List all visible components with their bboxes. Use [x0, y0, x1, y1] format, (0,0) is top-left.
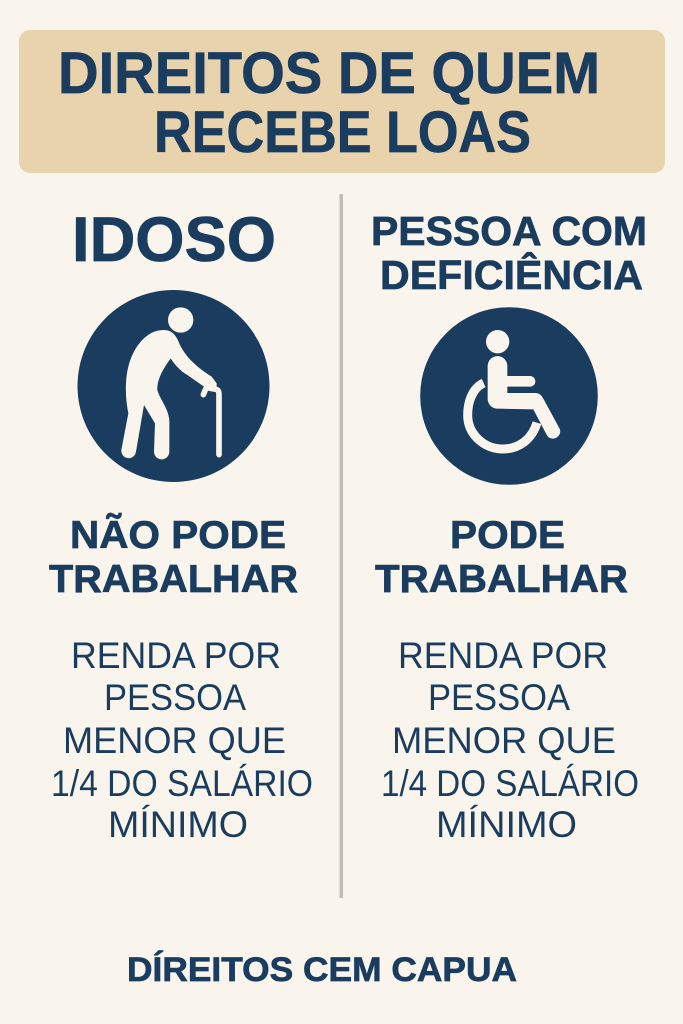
- title banner: [19, 30, 665, 173]
- panel: idoso: [49, 205, 313, 845]
- heading: idoso: IDOSO: [72, 205, 276, 275]
- footer text: DÍREITOS CEM CAPUA: [127, 951, 517, 989]
- icon: elderly person with cane: [78, 290, 270, 482]
- income text right: RENDA POR: [398, 635, 608, 676]
- status: nao pode trabalhar: [49, 513, 298, 601]
- status: pode trabalhar: TRABALHAR: [375, 558, 628, 601]
- income text right: PESSOA: [428, 677, 570, 718]
- title text: DIREITOS DE QUEM: [58, 41, 600, 106]
- income text left: MENOR QUE: [63, 720, 286, 761]
- title text: RECEBE LOAS: [154, 100, 531, 165]
- status: pode trabalhar: PODE: [450, 514, 565, 557]
- income text left: 1/4 DO SALÁRIO: [51, 763, 313, 804]
- heading: pessoa com deficiencia: DEFICIÊNCIA: [380, 252, 643, 298]
- heading: pessoa com deficiencia: PESSOA COM: [371, 208, 647, 254]
- status: nao pode trabalhar: TRABALHAR: [49, 558, 298, 601]
- income text left: PESSOA: [104, 677, 246, 718]
- income text left: RENDA POR: [71, 635, 281, 676]
- icon: wheelchair: [420, 307, 598, 485]
- income text right: [381, 635, 639, 845]
- status: pode trabalhar: [375, 514, 628, 601]
- heading: pessoa com deficiencia: [371, 208, 647, 298]
- panel: pessoa com deficiencia: [371, 208, 647, 845]
- status: nao pode trabalhar: NÃO PODE: [70, 513, 286, 557]
- income text left: MÍNIMO: [108, 804, 248, 845]
- income text right: MÍNIMO: [436, 804, 577, 845]
- title text: [58, 41, 600, 165]
- income text right: MENOR QUE: [392, 720, 616, 761]
- income text left: [51, 635, 313, 845]
- income text right: 1/4 DO SALÁRIO: [381, 763, 639, 804]
